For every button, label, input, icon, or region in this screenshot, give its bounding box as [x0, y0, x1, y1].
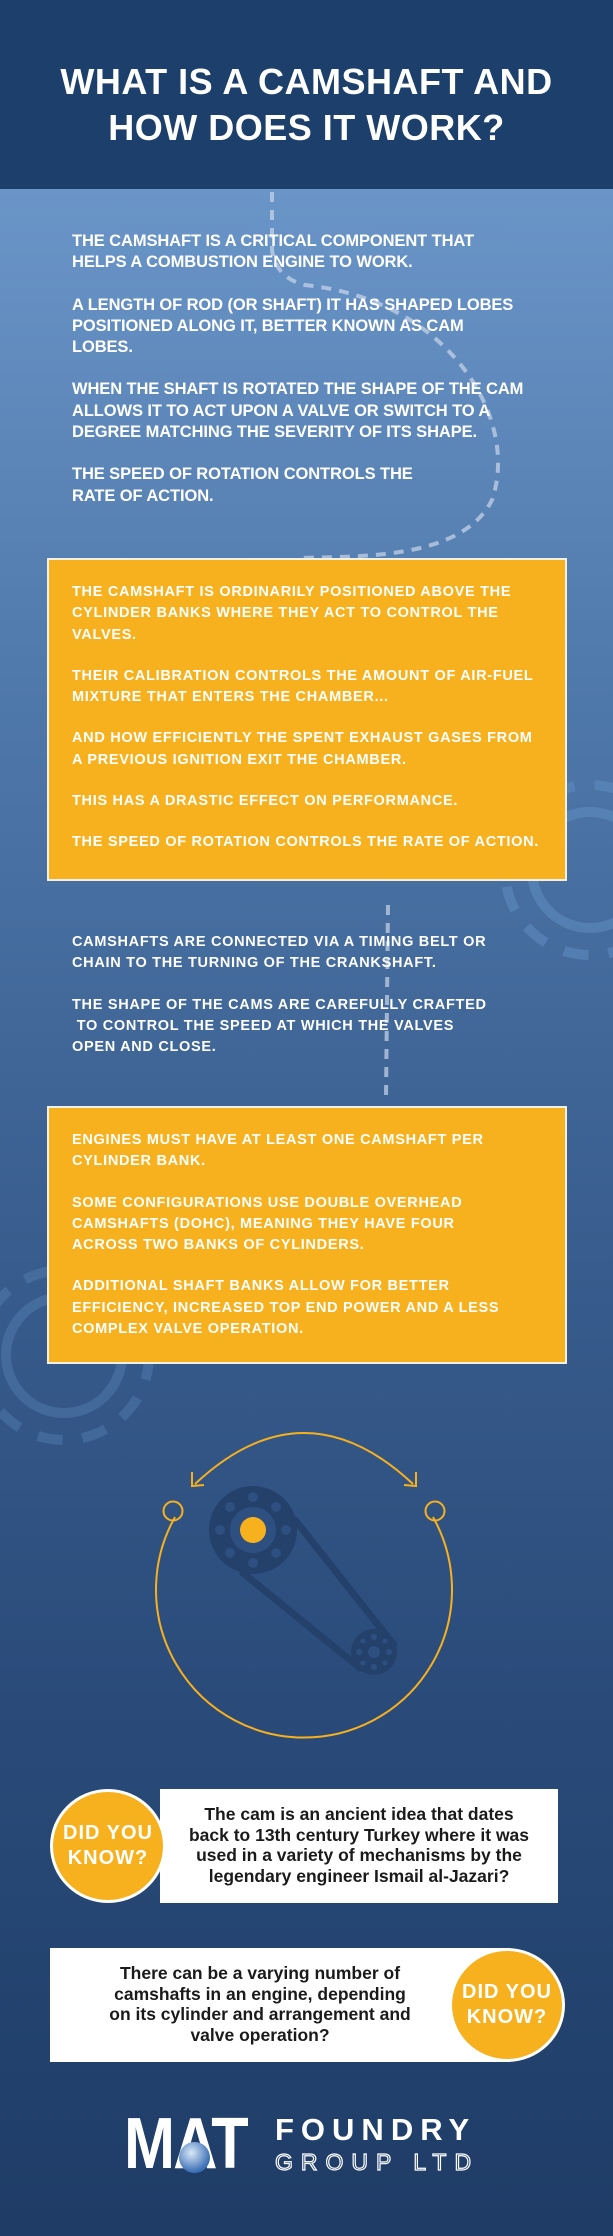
text block: timing belt: [72, 934, 487, 1055]
text block: timing belt: CAMSHAFTS ARE CONNECTED VIA A TIMING BELT OR: [72, 934, 486, 950]
text block: intro: THE CAMSHAFT IS A CRITICAL COMPONENT THAT: [72, 232, 474, 250]
text box 2: camshafts in an engine, depending: [114, 1984, 406, 2004]
text block: intro: ALLOWS IT TO ACT UPON A VALVE OR SWITCH TO A: [72, 402, 490, 420]
logo: [124, 2104, 476, 2184]
text box 1: [160, 1789, 558, 1903]
text: box 2: EFFICIENCY, INCREASED TOP END POWER AND A LESS: [72, 1300, 499, 1316]
panel: orange box 1: [47, 558, 567, 881]
text: box 1: A PREVIOUS IGNITION EXIT THE CHAMBER.: [72, 752, 407, 768]
badge: did you know: [50, 1789, 166, 1903]
text: box 1: CYLINDER BANKS WHERE THEY ACT TO CONTROL THE: [72, 605, 499, 621]
text block: intro: HELPS A COMBUSTION ENGINE TO WORK.: [72, 253, 413, 271]
text: box 1: THE SPEED OF ROTATION CONTROLS THE RATE OF ACTION.: [72, 834, 539, 850]
text: box 1: THEIR CALIBRATION CONTROLS THE AMOUNT OF AIR-FUEL: [72, 668, 533, 684]
badge: did you know: KNOW?: [68, 1847, 148, 1869]
text block: timing belt: TO CONTROL THE SPEED AT WHICH THE VALVES: [77, 1018, 454, 1034]
text block: intro: RATE OF ACTION.: [72, 487, 214, 505]
illustration: timing belt diagram: [155, 1432, 453, 1738]
text: box 1: THIS HAS A DRASTIC EFFECT ON PERFORMANCE.: [72, 793, 458, 809]
text box 1: legendary engineer Ismail al-Jazari?: [209, 1866, 509, 1886]
text box 2: valve operation?: [190, 2025, 330, 2045]
text box 1: back to 13th century Turkey where it was: [189, 1825, 529, 1845]
callout: did you know 1: [50, 1789, 558, 1903]
text box 2: on its cylinder and arrangement and: [109, 2004, 411, 2024]
logo: foundry: FOUNDRY: [275, 2112, 476, 2147]
text box 1: The cam is an ancient idea that dates: [204, 1804, 514, 1824]
text block: intro: THE SPEED OF ROTATION CONTROLS THE: [72, 465, 413, 483]
text block: intro: A LENGTH OF ROD (OR SHAFT) IT HAS SHAPED LOBES: [72, 296, 513, 314]
badge: did you know: DID YOU: [63, 1822, 153, 1844]
badge: did you know: DID YOU: [462, 1981, 552, 2003]
text block: intro: [72, 232, 523, 505]
title: WHAT IS A CAMSHAFT AND: [60, 61, 553, 102]
header: [0, 0, 613, 189]
text: box 2: [72, 1132, 499, 1337]
title: [60, 61, 553, 148]
text block: timing belt: CHAIN TO THE TURNING OF THE CRANKSHAFT.: [72, 955, 437, 971]
text block: intro: POSITIONED ALONG IT, BETTER KNOWN AS CAM: [72, 317, 464, 335]
text: box 1: THE CAMSHAFT IS ORDINARILY POSITIONED ABOVE THE: [72, 584, 511, 600]
text: box 1: MIXTURE THAT ENTERS THE CHAMBER...: [72, 689, 389, 705]
text: box 1: VALVES.: [72, 627, 137, 643]
text block: timing belt: THE SHAPE OF THE CAMS ARE CAREFULLY CRAFTED: [72, 997, 487, 1013]
text: box 2: ACROSS TWO BANKS OF CYLINDERS.: [72, 1237, 364, 1253]
text: box 2: COMPLEX VALVE OPERATION.: [72, 1321, 304, 1337]
logo: MAT: MAT: [124, 2104, 247, 2184]
text box 2: [50, 1948, 510, 2062]
badge: did you know: KNOW?: [467, 2006, 547, 2028]
text: box 2: ADDITIONAL SHAFT BANKS ALLOW FOR BETTER: [72, 1278, 450, 1294]
text: box 1: AND HOW EFFICIENTLY THE SPENT EXHAUST GASES FROM: [72, 730, 533, 746]
callout: did you know 2: [50, 1948, 565, 2062]
panel: orange box 2: [47, 1106, 567, 1364]
text box 2: There can be a varying number of: [120, 1963, 400, 1983]
badge: did you know: [449, 1948, 565, 2062]
text: box 2: CAMSHAFTS (DOHC), MEANING THEY HAVE FOUR: [72, 1216, 455, 1232]
text: box 1: [72, 584, 539, 850]
text box 1: used in a variety of mechanisms by the: [196, 1845, 522, 1865]
title: HOW DOES IT WORK?: [108, 107, 505, 148]
text block: intro: DEGREE MATCHING THE SEVERITY OF ITS SHAPE.: [72, 423, 477, 441]
text block: timing belt: OPEN AND CLOSE.: [72, 1039, 217, 1055]
text: box 2: ENGINES MUST HAVE AT LEAST ONE CAMSHAFT PER: [72, 1132, 484, 1148]
text: box 2: SOME CONFIGURATIONS USE DOUBLE OVERHEAD: [72, 1195, 462, 1211]
logo: globe: [179, 2142, 210, 2173]
text block: intro: WHEN THE SHAFT IS ROTATED THE SHAPE OF THE CAM: [72, 380, 523, 398]
text: box 2: CYLINDER BANK.: [72, 1153, 206, 1169]
text block: intro: LOBES.: [72, 338, 133, 356]
